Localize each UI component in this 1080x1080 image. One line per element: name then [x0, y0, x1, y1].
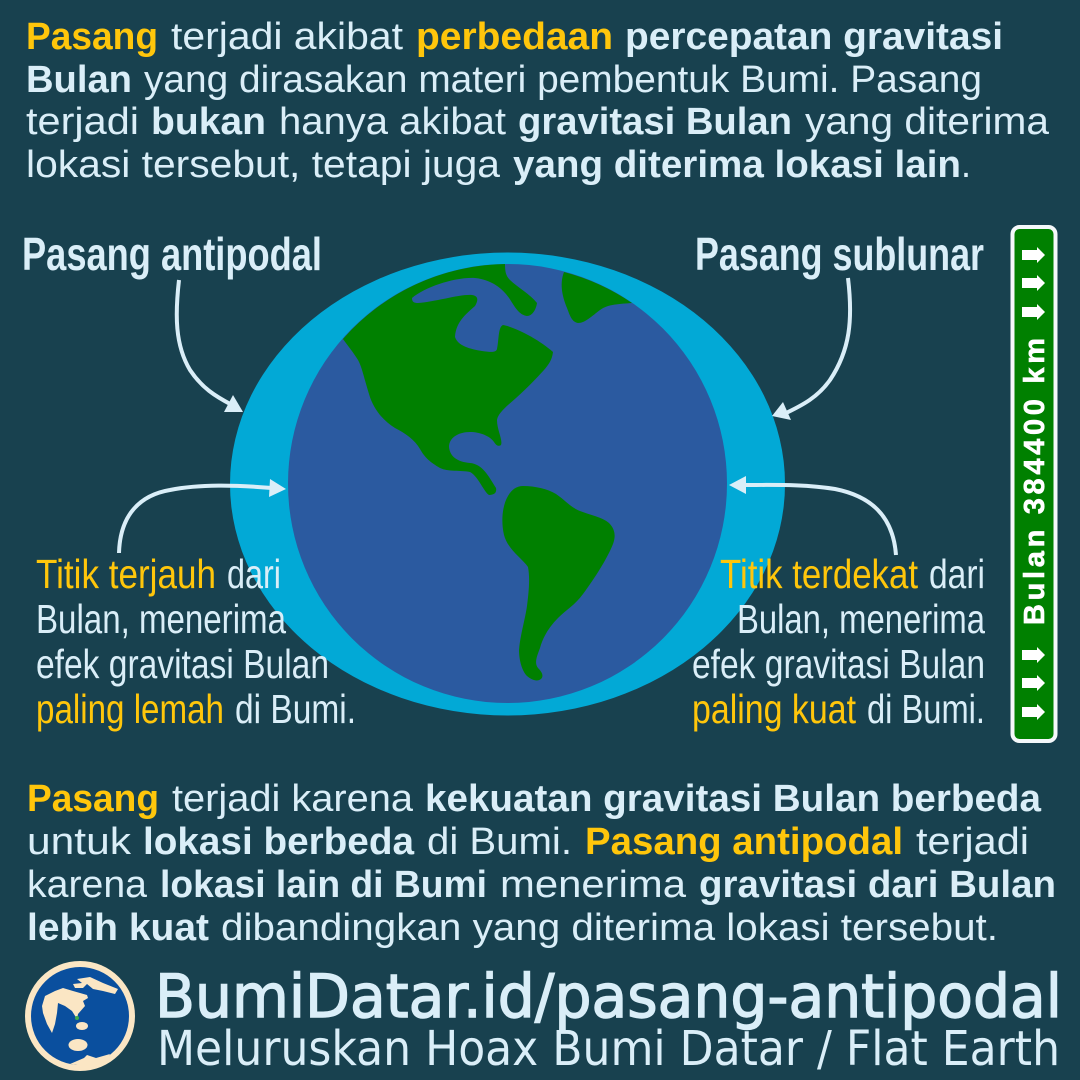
- land: Greenland: [562, 272, 632, 323]
- heading: Pasang antipodal: Pasang antipodal: [22, 228, 322, 280]
- right caption: nearest point: Titik terdekat: [720, 551, 919, 597]
- top explanation text: yang diterima lokasi lain: [513, 144, 961, 186]
- land: South America: [502, 486, 615, 680]
- top explanation text: gravitasi Bulan: [518, 101, 792, 143]
- right caption: nearest point: di Bumi.: [867, 686, 985, 732]
- bottom explanation text: lokasi berbeda: [143, 821, 415, 863]
- arrow: antipodal label to bulge: [177, 280, 243, 412]
- bottom explanation text: lokasi lain di Bumi: [160, 864, 487, 906]
- left caption: farthest point: efek gravitasi Bulan: [36, 641, 329, 687]
- sign arrows bottom: [1022, 647, 1045, 720]
- top explanation text: bukan: [151, 101, 266, 143]
- bottom explanation text: Pasang antipodal: [585, 821, 903, 863]
- road sign: distance to the Moon: [1012, 227, 1056, 741]
- left caption: farthest point: dari: [227, 551, 281, 597]
- bottom explanation text: di Bumi.: [427, 821, 572, 863]
- right caption: nearest point: dari: [929, 551, 985, 597]
- top explanation text: Bulan: [26, 59, 132, 101]
- distance label: Bulan 384400 km: [1019, 338, 1051, 625]
- arrow: nearest point: [729, 476, 896, 555]
- top explanation text: yang diterima: [805, 101, 1050, 143]
- top explanation text: yang dirasakan materi pembentuk Bumi. Pasang: [144, 59, 982, 101]
- bottom explanation text: untuk: [27, 821, 132, 863]
- arrow: farthest point: [119, 479, 286, 553]
- heading: Pasang sublunar: Pasang sublunar: [695, 228, 984, 280]
- bottom explanation text: Pasang: [27, 778, 159, 820]
- top explanation text: perbedaan: [416, 16, 613, 58]
- top explanation text: [26, 16, 1050, 186]
- bottom explanation text: karena: [27, 864, 148, 906]
- land: North America: [343, 264, 553, 495]
- top explanation text: hanya akibat: [279, 101, 506, 143]
- bottom explanation text: gravitasi dari Bulan: [699, 864, 1056, 906]
- left caption: farthest point: [36, 551, 356, 732]
- left caption: farthest point: paling lemah: [36, 686, 224, 732]
- bottom explanation text: [27, 778, 1056, 949]
- earth ocean disc: [288, 264, 727, 703]
- arrow: sublunar label to bulge: [772, 278, 850, 420]
- bottom explanation text: terjadi karena: [172, 778, 414, 820]
- right caption: nearest point: [692, 551, 985, 732]
- right caption: nearest point: efek gravitasi Bulan: [692, 641, 985, 687]
- logo: globe: [25, 961, 135, 1071]
- footer url: BumiDatar.id/pasang-antipodal: [155, 962, 1062, 1032]
- bottom explanation text: kekuatan gravitasi Bulan berbeda: [425, 778, 1042, 820]
- bottom explanation text: dibandingkan yang diterima lokasi tersebut.: [221, 907, 998, 949]
- right caption: nearest point: Bulan, menerima: [737, 596, 985, 642]
- top explanation text: lokasi tersebut, tetapi juga: [26, 144, 501, 186]
- earth diagram with tidal bulge: [230, 252, 785, 716]
- bottom explanation text: terjadi: [916, 821, 1029, 863]
- top explanation text: terjadi: [26, 101, 139, 143]
- left caption: farthest point: Titik terjauh: [36, 551, 216, 597]
- top explanation text: terjadi akibat: [171, 16, 403, 58]
- right caption: nearest point: paling kuat: [692, 686, 856, 732]
- bottom explanation text: menerima: [500, 864, 687, 906]
- sign arrows top: [1022, 247, 1045, 320]
- left caption: farthest point: di Bumi.: [235, 686, 356, 732]
- top explanation text: percepatan gravitasi: [625, 16, 1003, 58]
- top explanation text: .: [961, 144, 971, 186]
- bottom explanation text: lebih kuat: [27, 907, 209, 949]
- tidal bulge ellipse: [230, 252, 785, 716]
- left caption: farthest point: Bulan, menerima: [36, 596, 286, 642]
- top explanation text: Pasang: [26, 16, 158, 58]
